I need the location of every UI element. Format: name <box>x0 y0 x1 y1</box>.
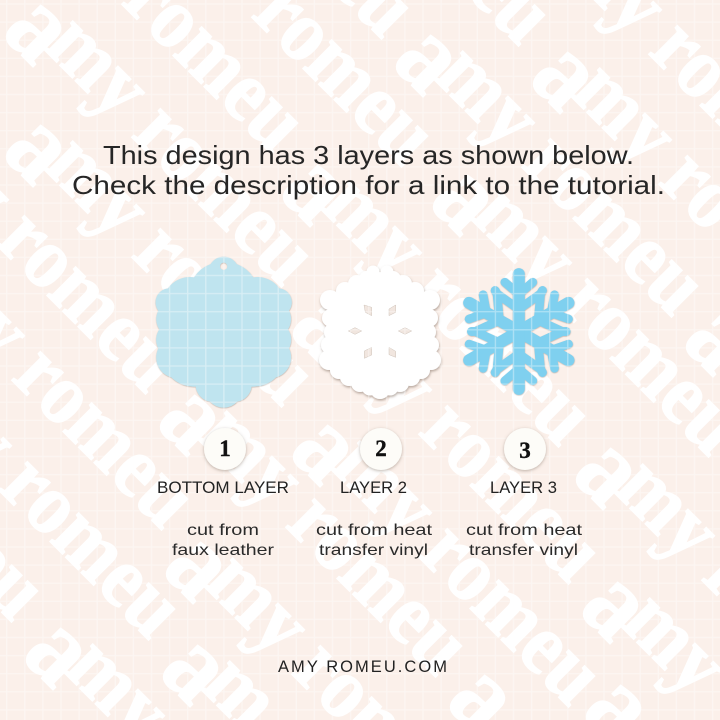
watermark pattern: amy romeu: a <box>143 504 261 622</box>
label: layer 2: LAYER 2 <box>340 479 407 497</box>
layer 3: blue snowflake <box>457 274 580 389</box>
watermark pattern: amy romeu: a <box>410 137 528 255</box>
badge 1: 1 <box>219 436 231 461</box>
label: layer 2 <box>316 479 433 559</box>
watermark pattern: amy romeu: a <box>260 127 378 245</box>
badge 3 <box>504 428 546 470</box>
label: layer 2: cut from heat <box>316 522 433 539</box>
watermark pattern: amy romeu: my romeu <box>182 384 492 693</box>
heading: This design has 3 layers as shown below. <box>103 140 634 170</box>
badge 3: 3 <box>519 438 531 463</box>
label: bottom layer: cut from <box>187 522 259 539</box>
watermark pattern: amy romeu: a <box>270 387 388 505</box>
layer 1: scalloped tag <box>156 257 292 408</box>
watermark pattern: amy romeu: a <box>560 544 678 662</box>
badge 2 <box>360 428 402 470</box>
watermark pattern: amy romeu: my romeu <box>418 24 720 333</box>
heading: Check the description for a link to the tutorial. <box>72 170 665 200</box>
footer url: AMY ROMEU.COM <box>278 658 447 676</box>
label: layer 3: cut from heat <box>466 522 583 539</box>
watermark pattern: amy romeu: my romeu <box>315 414 625 720</box>
watermark pattern: amy romeu: my romeu <box>28 0 338 303</box>
label: bottom layer: faux leather <box>172 542 275 559</box>
label: bottom layer: BOTTOM LAYER <box>157 479 289 497</box>
badge 2: 2 <box>375 436 387 461</box>
layer 2: diamond cut-outs <box>348 305 412 358</box>
watermark pattern: amy romeu: a <box>553 410 671 528</box>
label: layer 3 <box>466 479 583 559</box>
heading <box>72 140 665 200</box>
watermark pattern: amy romeu: a <box>510 14 628 132</box>
watermark pattern: amy romeu: my romeu <box>305 154 615 463</box>
watermark pattern: amy romeu: a <box>137 357 255 475</box>
label: layer 3: LAYER 3 <box>490 479 557 497</box>
watermark pattern: amy romeu: a <box>3 590 121 708</box>
watermark pattern: amy romeu: a <box>373 0 491 115</box>
label: bottom layer <box>157 479 289 559</box>
layer 2: white scalloped hexagon <box>319 266 441 399</box>
watermark pattern: amy romeu: my romeu <box>28 114 338 423</box>
watermark pattern: amy romeu: a <box>270 264 388 382</box>
label: layer 3: transfer vinyl <box>469 542 578 559</box>
watermark pattern: amy romeu: my romeu <box>315 291 625 600</box>
badge 1 <box>204 428 246 470</box>
label: layer 2: transfer vinyl <box>319 542 428 559</box>
